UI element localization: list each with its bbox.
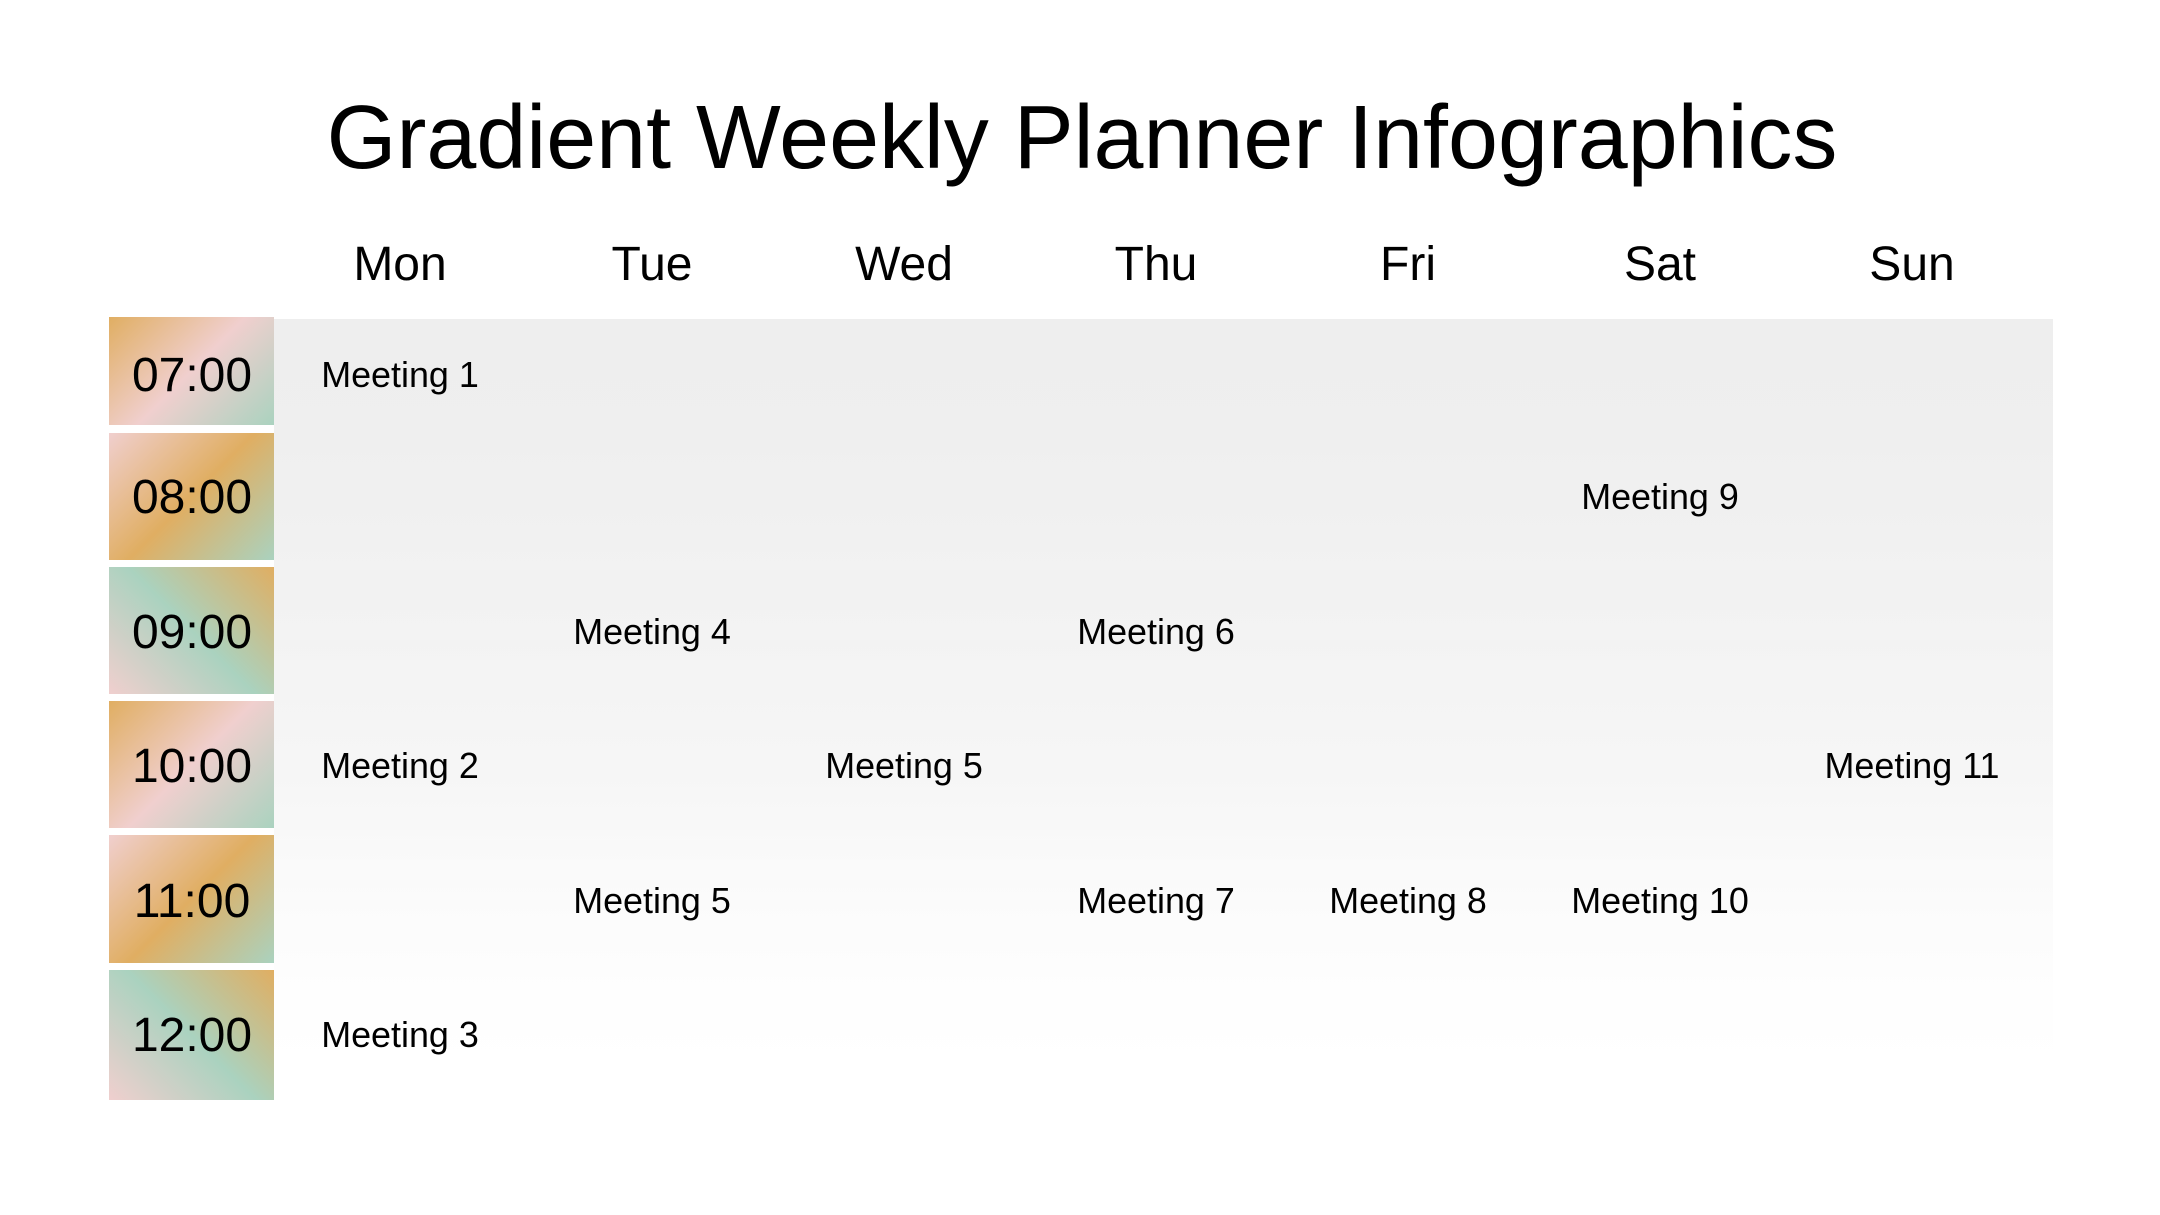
day headers [353, 238, 1955, 291]
Meeting 9: Meeting 9 [1581, 477, 1739, 517]
Meeting 3: Meeting 3 [321, 1015, 479, 1055]
time cell 11:00: 11:00 [134, 875, 250, 928]
day headers: Mon [353, 238, 447, 291]
Meeting 10: Meeting 10 [1571, 881, 1749, 921]
Meeting 5 Tuesday: Meeting 5 [573, 881, 731, 921]
day headers: Thu [1115, 238, 1197, 291]
time cell 10:00: 10:00 [132, 740, 252, 793]
title: Gradient Weekly Planner Infographics [327, 88, 1837, 188]
time column [109, 317, 274, 1100]
day headers: Sat [1624, 238, 1696, 291]
time cell 09:00: 09:00 [132, 606, 252, 659]
Meeting 2: Meeting 2 [321, 746, 479, 786]
meetings [321, 355, 1999, 1055]
time cell 12:00 [109, 970, 274, 1100]
Meeting 8: Meeting 8 [1329, 881, 1487, 921]
time cell 08:00 [109, 433, 274, 560]
schedule background panel [274, 319, 2053, 1069]
Meeting 7: Meeting 7 [1077, 881, 1235, 921]
time cell 07:00 [109, 317, 274, 425]
Meeting 11: Meeting 11 [1825, 746, 1999, 786]
time cell 07:00: 07:00 [132, 349, 252, 402]
Meeting 1: Meeting 1 [321, 355, 479, 395]
Meeting 6: Meeting 6 [1077, 612, 1235, 652]
time cell 08:00: 08:00 [132, 471, 252, 524]
time cell 10:00 [109, 701, 274, 828]
time cell 11:00 [109, 835, 274, 963]
day headers: Wed [855, 238, 953, 291]
day headers: Sun [1869, 238, 1955, 291]
time cell 09:00 [109, 567, 274, 694]
Meeting 5 Wednesday: Meeting 5 [825, 746, 983, 786]
time cell 12:00: 12:00 [132, 1009, 252, 1062]
day headers: Fri [1380, 238, 1436, 291]
day headers: Tue [612, 238, 692, 291]
Meeting 4: Meeting 4 [573, 612, 731, 652]
